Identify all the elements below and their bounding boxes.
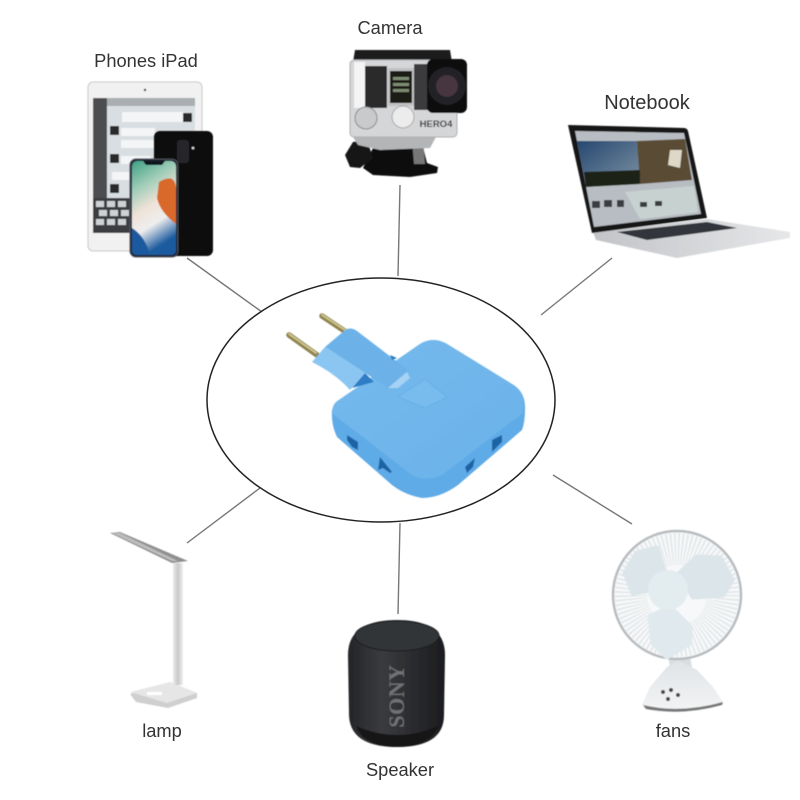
icon: blue plug adapter (289, 315, 525, 498)
connector line: lamp (187, 488, 260, 543)
group: phones and iPad (88, 50, 213, 257)
outlet sockets (347, 435, 502, 473)
label: fans: fans (656, 720, 690, 741)
label: Camera: Camera (357, 17, 423, 38)
label: Speaker: Speaker (366, 759, 434, 780)
adapter top face (332, 340, 524, 478)
icon: action camera (345, 50, 467, 177)
icon: Sony speaker: SONY (384, 664, 409, 728)
group: notebook (568, 92, 790, 258)
label: lamp: lamp (142, 720, 182, 741)
connector line: speaker (398, 523, 400, 614)
rotating plug head (325, 328, 408, 388)
central ellipse (207, 278, 555, 522)
icon: action camera: HERO4 (420, 119, 453, 130)
group: lamp (110, 532, 197, 741)
group: fans (613, 531, 741, 741)
connector line: fans (553, 475, 632, 524)
group: camera (345, 17, 467, 177)
icon: desk lamp (110, 532, 197, 708)
label: Notebook: Notebook (604, 92, 691, 114)
icon: black phone (154, 131, 213, 256)
label: Phones iPad: Phones iPad (94, 50, 198, 71)
group: speaker (348, 620, 445, 780)
icon: laptop (568, 125, 790, 258)
adapter body silhouette (332, 340, 525, 498)
adapter pins (289, 315, 346, 355)
icon: desk fan (613, 531, 741, 712)
icon: front phone (130, 159, 178, 257)
embossed square (398, 379, 447, 408)
icon: tablet (88, 82, 202, 251)
icon: Sony speaker (348, 620, 445, 747)
connector line: phones (187, 258, 262, 312)
connector line: camera (398, 185, 400, 276)
connector line: notebook (541, 258, 612, 315)
